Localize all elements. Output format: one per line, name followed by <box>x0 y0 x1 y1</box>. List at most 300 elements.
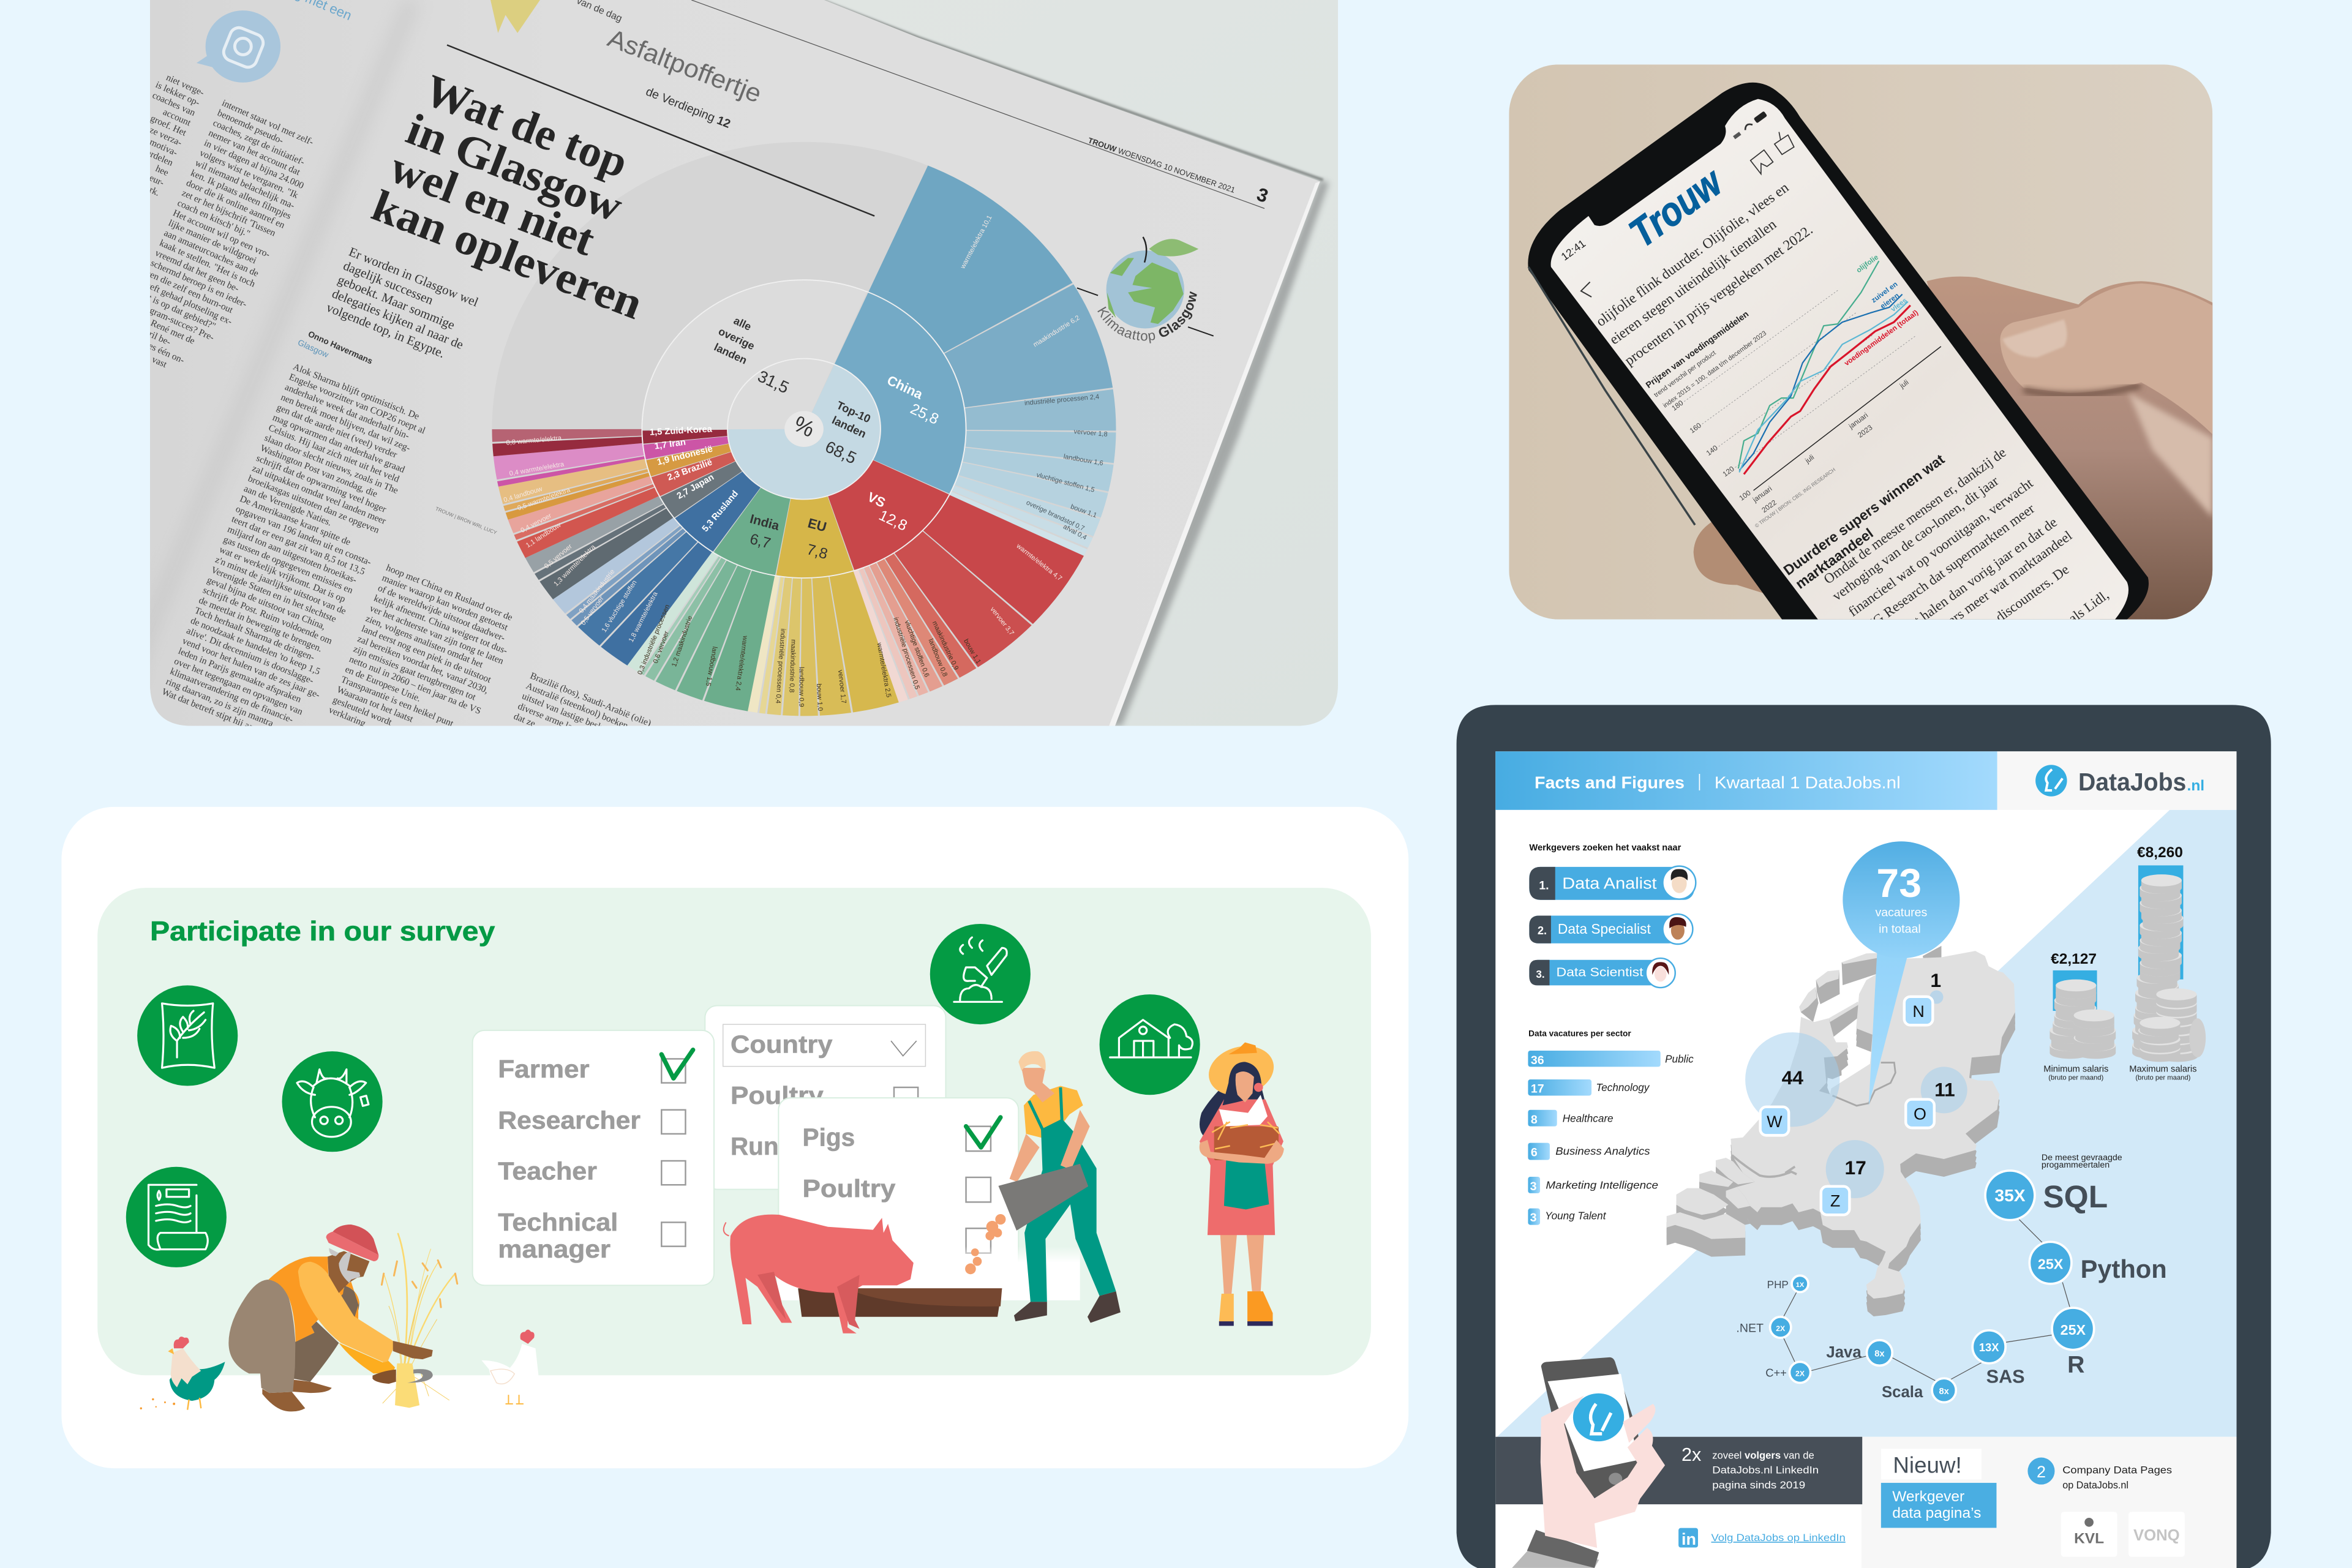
dress <box>1200 1100 1283 1235</box>
diagonal blue background <box>1497 810 2236 1437</box>
network links <box>1784 1218 2070 1381</box>
sickle <box>407 1369 433 1382</box>
back leg <box>228 1280 295 1393</box>
text block: far left column <box>150 76 203 196</box>
text block: left page column: wil niemand belachelijk ma- <box>193 158 296 211</box>
region marker: N: N <box>1912 1002 1925 1021</box>
logo circle <box>1573 1394 1624 1441</box>
text block: left page column: coach en kitsch' bij." <box>176 198 252 239</box>
chart: outer segment labels: 0,8 warmte/elektra <box>506 435 562 447</box>
legs <box>1220 1233 1264 1294</box>
text: source credit: TROUW | BRON WRI, LUCY <box>435 505 498 536</box>
wall behind magazine <box>825 0 1338 726</box>
icon: cow <box>282 1051 383 1152</box>
chart: inner ring labels: 68,5 <box>822 437 859 468</box>
text block: main column: gen dat de aarde niet (veel) verder <box>275 402 399 460</box>
hen beak <box>168 1348 174 1354</box>
chart: outer segment labels: 0,4 warmte/elektra <box>509 460 565 478</box>
node: SQL: 35X <box>1994 1185 2026 1205</box>
beard <box>339 1252 360 1283</box>
text block: second column: ver het achterste van zijn tong te laten <box>368 603 505 667</box>
lower sleeve <box>339 1343 395 1373</box>
phone screen <box>1551 99 2128 620</box>
chart: country labels: India <box>748 512 781 533</box>
node: Scala: Scala <box>1882 1384 1923 1401</box>
text block: main column: alive'. Dit decennium is doorslagge- <box>185 626 315 686</box>
chart: country labels: 1,7 Iran <box>654 438 686 452</box>
text: company data pages: Company Data Pages <box>2062 1465 2172 1476</box>
panel: survey illustration <box>61 807 1408 1468</box>
text block: main column: mag opwarmen dan anderhalve graad <box>271 412 407 475</box>
chart: outer segment labels: 0,5 warmte/elektra <box>517 486 572 512</box>
text block: main column: aan de Verenigde Naties. <box>242 484 333 528</box>
photo background <box>1509 64 2212 620</box>
text block: main column: z'n minst de jaarlijkse uitstoot van de <box>214 555 348 617</box>
article body text: omzet halen dan vorig jaar en dat de <box>1887 514 2060 646</box>
region marker: W: W <box>1767 1112 1783 1131</box>
line labels: voedingsmiddelen (totaal) <box>1843 309 1920 367</box>
node: SAS <box>1972 1330 2025 1387</box>
map: harbour water <box>1819 1057 1842 1094</box>
bar: healthcare <box>1528 1110 1614 1127</box>
bar chart: sectors <box>1528 1051 1694 1225</box>
salary value: €8,260 <box>2137 844 2183 861</box>
byline: Glasgow <box>296 338 330 359</box>
top edge shadow <box>813 0 1323 180</box>
line labels: olijfolie <box>1855 253 1880 274</box>
hair <box>1222 1062 1264 1105</box>
chart: outer segment labels: 0,5 vervoer <box>580 595 606 626</box>
chart: inner ring labels: 31,5 <box>755 367 792 397</box>
text block: third column: Australië (steenkool) boeken <box>525 681 629 731</box>
chart axis labels: 140 <box>1705 444 1719 457</box>
text block: main column: miljard ton aan uitgestoten broeikas- <box>226 524 358 585</box>
text block: second column: of de wereldwijde uitstoot daadwer- <box>377 583 506 643</box>
chart: outer segment labels: 0,4 landbouw <box>503 486 543 504</box>
text block: third column: dat ze <box>512 711 537 729</box>
face <box>1236 1071 1254 1102</box>
text block: left page column: lijke manier de wildgroei <box>167 218 258 266</box>
logo: DataJobs: DataJobs <box>2078 768 2186 796</box>
node: Java <box>1826 1340 1892 1365</box>
text: programming languages heading <box>2042 1153 2122 1170</box>
option checkbox <box>661 1059 685 1083</box>
screen content <box>1559 111 2111 666</box>
text block: far left column: groef. Het <box>149 113 189 138</box>
text block: far left column: veroordelen <box>129 140 175 168</box>
line: food total <box>1744 306 1911 475</box>
text block: left page column: pert is op dat gebied?" <box>135 288 217 332</box>
illustration: pig <box>724 1215 914 1334</box>
bar: young talent: 3 <box>1530 1211 1537 1225</box>
chart axis <box>1754 347 1941 490</box>
magazine spread <box>150 0 1320 727</box>
line labels: zuivel en <box>1870 280 1899 304</box>
chart: outer segment labels: 0,4 maakindustrie <box>578 568 617 615</box>
text: company data pages <box>2062 1465 2172 1491</box>
text block: main column: Wat dat betreft stipt hij aan <box>160 686 259 735</box>
text block: left page column: nemer van het account dat <box>207 128 302 178</box>
header subtitle: Kwartaal 1 DataJobs.nl <box>1715 772 1901 792</box>
text block: main column: Alok Sharma blijft optimistisch. De <box>291 362 421 422</box>
text block: second column: manier waarop kan worden getoetst <box>380 572 509 633</box>
article body text: discounters als Lidl, <box>2012 587 2111 666</box>
region bubble: south <box>1826 1140 1884 1198</box>
text block: second column: land eerst nog een piek in de uitstoot <box>360 623 493 685</box>
chart: country labels <box>650 372 941 563</box>
continent <box>1107 258 1134 318</box>
region counts: 1 <box>1930 969 1941 991</box>
chart axis labels: juli <box>1803 453 1816 465</box>
line: dairy and eggs <box>1739 294 1903 470</box>
logo: KVL: KVL <box>2074 1531 2104 1547</box>
callout label: in totaal <box>1879 923 1921 936</box>
bar: public: Public <box>1665 1053 1694 1065</box>
job pill 2: Data Specialist <box>1558 921 1651 937</box>
chart: outer segment labels: industriële processen 0,4 <box>774 628 787 703</box>
text: company data pages: op DataJobs.nl <box>2062 1480 2128 1491</box>
wheat sheaf <box>395 1364 419 1408</box>
region marker: O <box>1906 1100 1934 1128</box>
headline: Wat de top <box>418 65 634 187</box>
chart axis labels: 2022 <box>1760 498 1778 514</box>
masthead accent <box>490 0 540 33</box>
salary chart: maximum <box>2129 844 2206 1082</box>
chart source: © TROUW | BRON: CBS, ING RESEARCH <box>1754 467 1836 529</box>
node: Java: Java <box>1826 1344 1862 1361</box>
white card <box>61 807 1408 1468</box>
bar: healthcare: Healthcare <box>1563 1112 1614 1124</box>
chart: outer segment labels: overige brandstof 0,7 <box>1025 499 1086 533</box>
option checkbox <box>966 1228 991 1253</box>
hair <box>1018 1051 1046 1071</box>
text block: second column: netto nul in 2060 – tien jaar na de VS <box>348 654 483 716</box>
text block: main column: teert dat er een gat zit van 8,5 tot 13,5 <box>230 514 367 577</box>
inner pants <box>293 1321 339 1382</box>
chart: outer segment labels: maakindustrie 0,9 <box>931 620 960 671</box>
text block: left page column <box>150 99 312 367</box>
article body text: financieel wat op vooruitgaan, verwacht <box>1846 475 2036 620</box>
employer pages box <box>1881 1483 1996 1528</box>
node: Python <box>2029 1242 2167 1284</box>
chart: outer segment labels: 1,1 landbouw <box>525 522 562 549</box>
shirt <box>1024 1086 1083 1140</box>
thumb <box>2000 283 2213 435</box>
panel: phone photo <box>1509 64 2213 666</box>
article subheading: marktaandeel <box>1792 525 1876 592</box>
icon: barn and tree <box>1100 994 1200 1095</box>
coin stack <box>2132 874 2206 1062</box>
region bubble: west <box>1745 1032 1839 1127</box>
hat crown <box>1228 1042 1257 1054</box>
chart: outer segment labels: 0,4 vervoer <box>519 512 553 535</box>
option label: Technical <box>498 1208 618 1236</box>
region marker: W <box>1760 1107 1789 1135</box>
chart axis labels: januari <box>1847 411 1869 431</box>
text block: left page column: Het account wil op een vro- <box>171 208 271 260</box>
chart: outer segment labels: 0,6 vervoer <box>652 630 671 664</box>
screen <box>1495 751 2236 1568</box>
map: Netherlands <box>1667 946 2015 1316</box>
chart: outer segment labels: vluchtige stoffen 1,5 <box>1035 471 1095 494</box>
logo mark <box>1591 1404 1611 1434</box>
bar: healthcare: 8 <box>1531 1113 1538 1127</box>
callout circle <box>1843 841 1959 958</box>
chart: country labels: 25,8 <box>907 400 941 428</box>
text block: main column: Verenigde Staten en in het slechtste <box>209 565 338 625</box>
headline: wel en niet <box>383 142 602 265</box>
overalls <box>1024 1119 1116 1302</box>
text block: far left column: erk. <box>144 183 161 198</box>
logo: DataJobs <box>2035 765 2204 797</box>
job pill 1: 1. <box>1539 879 1549 893</box>
text block: main column: ring daarvan, zo is zijn mantra. <box>165 677 277 730</box>
hand <box>1541 1395 1665 1548</box>
text block: main column <box>160 362 432 751</box>
text block: far left column: is lekker op- <box>154 80 201 108</box>
back hair <box>1200 1074 1236 1135</box>
icon: status indicators <box>1732 111 1767 139</box>
text block: main column: schrijft dat de opwarming veel hoger <box>255 453 388 515</box>
text block: second column: hoop met China en Rusland over de <box>385 563 514 623</box>
logo: KVL <box>2061 1512 2117 1557</box>
text block: main column: Engelse voorzitter van COP26 roept al <box>287 372 427 436</box>
green check <box>966 1117 1001 1147</box>
region marker: Z <box>1821 1187 1849 1215</box>
node: R <box>2052 1308 2094 1378</box>
line labels: vlees <box>1890 296 1909 313</box>
text block: second column: Transparantie is een heikel punt. <box>339 674 457 730</box>
survey card: country and poultry <box>705 1005 945 1190</box>
chart: outer segment labels: landbouw 1,6 <box>1063 453 1103 467</box>
logo: DataJobs: .nl <box>2187 778 2204 794</box>
illustration: teal hen with seeds <box>140 1337 225 1410</box>
bar: young talent: Young Talent <box>1545 1210 1607 1222</box>
new badge: Nieuw! <box>1893 1453 1962 1478</box>
option checkbox <box>661 1222 685 1247</box>
icon: grain sack <box>137 985 238 1086</box>
option checkbox <box>661 1110 685 1134</box>
logo: VONQ: VONQ <box>2133 1527 2180 1544</box>
chest <box>339 1286 359 1318</box>
chart: outer segment labels: maakindustrie 0,8 <box>787 639 797 692</box>
chart: outer segment labels: warmte/elektra 2,4 <box>734 634 749 691</box>
byline <box>296 327 374 377</box>
map: Flevoland shoreline <box>1833 1063 1895 1106</box>
chart: inner ring labels: landen <box>830 413 868 440</box>
chart: country labels: 1,5 Zuid-Korea <box>650 424 713 438</box>
intro text: delegaties kijken al naar de <box>330 286 465 352</box>
article body text: Omdat de meeste mensen er, dankzij de <box>1821 445 2009 587</box>
chart: country labels: 7,8 <box>805 541 829 563</box>
head <box>1021 1068 1054 1102</box>
text: article intro: procenten in prijs vergeleken met 2022. <box>1622 222 1816 369</box>
region counts <box>1782 969 1955 1179</box>
line: olive oil <box>1738 261 1879 468</box>
chart: country labels: 2,3 Brazilië <box>666 457 713 483</box>
strap <box>1061 1087 1062 1122</box>
node: .NET: 2X <box>1776 1324 1786 1333</box>
hand <box>1927 277 2213 620</box>
salary label: Minimum salaris <box>2043 1064 2108 1074</box>
map shape in traced coordinates <box>1667 946 2015 1316</box>
text block: far left column: account <box>161 107 193 129</box>
chart: outer segment labels: bouw 1,0 <box>815 683 824 711</box>
bar: marketing intelligence: 3 <box>1530 1180 1537 1193</box>
icon: LinkedIn: in <box>1681 1530 1696 1548</box>
logo caption: Klimaattop Glasgow <box>1097 291 1197 343</box>
text block: main column: anderhalve week dat anderhalf bin- <box>284 382 411 441</box>
bar: young talent <box>1528 1209 1607 1225</box>
map: land extrusion <box>1667 957 2015 1316</box>
text: de Verdieping: de Verdieping 12 <box>644 85 732 131</box>
text block: left page column: kaak te stellen. "Het is toch <box>158 238 257 290</box>
node: .NET <box>1736 1317 1791 1338</box>
badge: number of company pages <box>2027 1458 2054 1485</box>
hat <box>1203 1039 1279 1103</box>
text block: second column: zien, volgens analisten omdat het <box>364 613 485 670</box>
chart: outer segment labels: warmte/elektra 2,5 <box>875 642 892 698</box>
icon: instagram bubble <box>197 10 280 83</box>
hair <box>329 1248 339 1256</box>
bar: technology: Technology <box>1596 1081 1650 1093</box>
text block: third column: Brazilië (bos), Saudi-Arabië (olie), <box>528 670 655 730</box>
green background <box>97 888 1371 1375</box>
card background <box>705 1005 945 1190</box>
scoop <box>998 1164 1088 1231</box>
text block: far left column: niet verge- <box>165 72 206 98</box>
node: SAS: SAS <box>1986 1367 2025 1387</box>
line labels: eieren <box>1879 291 1901 310</box>
footer: dark band <box>1495 1437 1862 1504</box>
hand on wheat <box>393 1341 433 1359</box>
soles <box>1219 1321 1273 1326</box>
chart: inner ring labels: landen <box>712 341 749 367</box>
text block: left page column: door die ik online aantref en <box>185 178 287 231</box>
chart subtitle: index 2015 = 100, data t/m december 2023 <box>1662 329 1768 410</box>
globe <box>1106 250 1184 328</box>
intro text: Er worden in Glasgow wel <box>347 244 481 310</box>
tick <box>1077 288 1098 296</box>
article body text: winnen van discounters. De <box>1937 561 2072 665</box>
employer pages box: Werkgever <box>1892 1488 1964 1505</box>
text block: third column: diverse arme landen <box>516 701 591 739</box>
chart: outer segment labels: 1,8 warmte/elektra <box>628 590 659 643</box>
chart: outer segment labels: warmte/elektra 10,1 <box>959 214 994 271</box>
text block: second column: Waaraan tot het laatst <box>336 685 415 725</box>
region bubble: north <box>1929 990 1943 1004</box>
map: wadden island sides <box>1799 946 1941 1037</box>
palm light <box>2128 393 2212 517</box>
right boot <box>1247 1291 1273 1322</box>
followers text: DataJobs.nl LinkedIn <box>1712 1465 1819 1476</box>
chart axis labels: 100 <box>1738 489 1753 503</box>
option label: manager <box>498 1235 611 1263</box>
text: clock: 12:41 <box>1559 237 1588 263</box>
illustration: white hen <box>481 1330 538 1404</box>
node: Java: 8x <box>1874 1349 1885 1359</box>
survey card: livestock <box>778 1098 1018 1285</box>
bar: public <box>1528 1051 1694 1067</box>
text block: second column: en de Europese Unie. <box>344 664 423 704</box>
chart: outer segment labels: 1,6 vluchtige stoffen <box>601 579 639 634</box>
text block: main column: broeikasgas uitstoten dan ze opgeven <box>246 473 381 536</box>
node: PHP: PHP <box>1767 1278 1789 1291</box>
bar: technology <box>1528 1079 1650 1096</box>
illustration: man with feed scoop <box>965 1051 1121 1323</box>
text block: left page column: internet staat vol met zelf- <box>220 98 315 148</box>
node: PHP: 1X <box>1796 1281 1805 1289</box>
callout: total vacancies <box>1843 841 1959 1106</box>
illustration: hand holding phone <box>1512 1357 1665 1568</box>
header separator <box>1699 774 1700 790</box>
strap <box>1029 1101 1042 1130</box>
card background <box>473 1030 714 1285</box>
node: R: R <box>2067 1351 2084 1378</box>
chart: centre label: % <box>790 411 819 442</box>
text block: far left column: eur- <box>148 173 166 188</box>
region bubble: east <box>1921 1067 1967 1113</box>
text block: far left column: motiva- <box>148 137 179 158</box>
map: river delta <box>1732 1155 1797 1177</box>
node: SQL: SQL <box>2043 1179 2108 1214</box>
sleeve <box>298 1262 394 1362</box>
page edge <box>1108 181 1320 727</box>
phone body <box>1541 1357 1647 1498</box>
text block: main column: de noodzaak te handelen 'to keep 1,5 <box>189 615 322 677</box>
hen neck <box>171 1348 201 1387</box>
chart title: Prijzen van voedingsmiddelen <box>1644 309 1751 391</box>
turban band <box>326 1232 378 1261</box>
chart axis labels: 180 <box>1670 399 1685 413</box>
chart: outer segment labels: vervoer 3,7 <box>989 606 1015 637</box>
salary label: Maximum salaris <box>2129 1064 2196 1074</box>
illustration: woman with hen <box>1200 1039 1284 1326</box>
text block: main column: de meetlat in beweging te brengen. <box>197 595 324 655</box>
falling feed <box>965 1214 1005 1274</box>
text: article intro: olijfolie flink duurder. Olijfolie, vlees en <box>1593 179 1792 330</box>
node: R: 25X <box>2061 1322 2086 1338</box>
white fade behind trough <box>777 1247 1080 1300</box>
article body text <box>1821 445 2111 666</box>
leaf <box>1149 239 1198 257</box>
chart: country labels: 1,9 Indonesië <box>656 444 714 467</box>
chart: outer segment labels: vluchtige stoffen 0,6 <box>903 620 930 678</box>
hen legs <box>506 1395 524 1404</box>
node: .NET: .NET <box>1736 1321 1764 1335</box>
node: C++ <box>1765 1362 1811 1383</box>
option checkbox <box>661 1161 685 1185</box>
finger behind phone <box>1694 510 1785 600</box>
text block: far left column: hee <box>154 163 170 178</box>
chart: outer segment labels: landbouw 0,8 <box>927 638 949 678</box>
intro text: dagelijk successen <box>341 258 435 307</box>
node: Scala <box>1882 1378 1956 1402</box>
spine fold shadow <box>268 11 410 345</box>
node: SQL <box>1985 1171 2108 1220</box>
text block: left page column: aan amateurcoaches aan de <box>162 228 260 279</box>
job pill 2: 2. <box>1538 924 1547 937</box>
chart: outer segment labels: vervoer 1,8 <box>1073 428 1108 438</box>
followers text: pagina sinds 2019 <box>1712 1479 1805 1491</box>
hen wing outline <box>490 1369 514 1384</box>
node: SAS: 13X <box>1979 1341 1999 1354</box>
headline <box>366 65 649 329</box>
header logo panel <box>1997 751 2236 810</box>
text block: left page column: Instagram-succes? Pre- <box>131 298 216 343</box>
region marker: O: O <box>1914 1105 1926 1123</box>
illustration: farmer cutting wheat <box>228 1225 457 1411</box>
